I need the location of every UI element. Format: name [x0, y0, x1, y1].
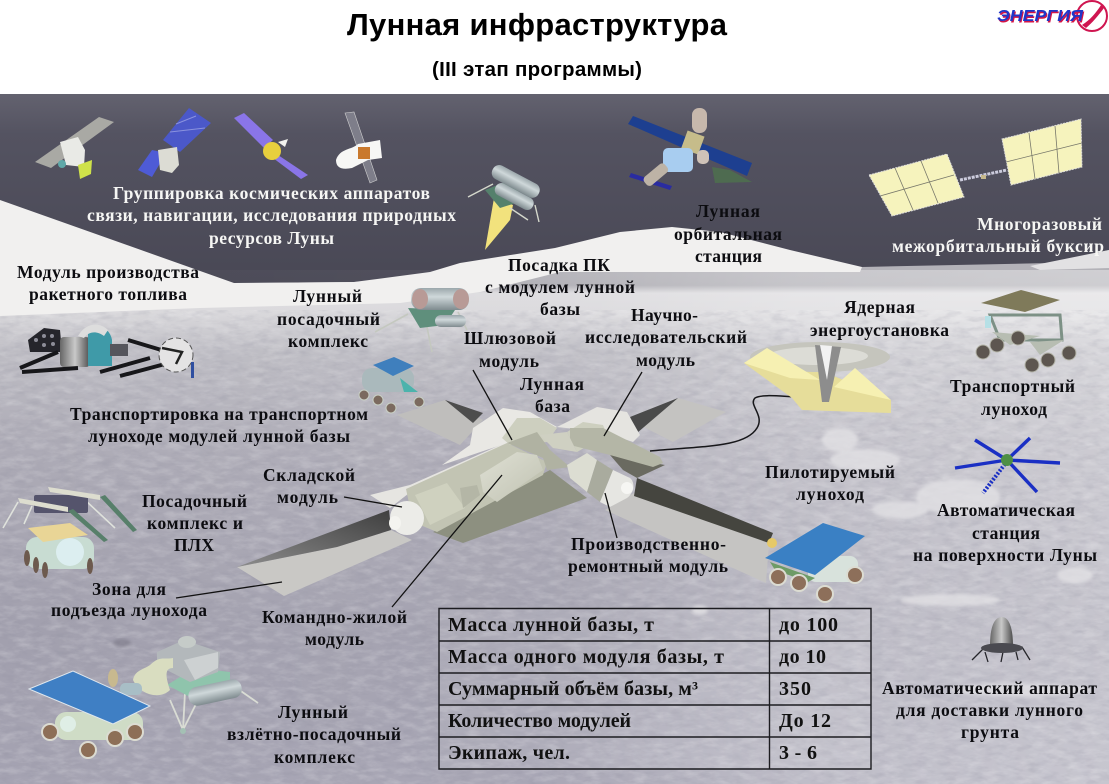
- label: command module: Командно-жилой: [262, 607, 407, 627]
- label: landing complex: комплекс: [288, 331, 368, 351]
- data table: Суммарный объём базы, м³: [448, 678, 698, 700]
- label: soil return: для доставки лунного: [896, 700, 1083, 720]
- label: piloted rover: луноход: [796, 484, 864, 504]
- ramp: left: [237, 530, 412, 596]
- label: landing complex and PLH: комплекс и: [147, 513, 243, 533]
- label: rover access zone: [51, 579, 207, 620]
- label: piloted rover: Пилотируемый: [765, 462, 895, 482]
- label: airlock module: Шлюзовой: [464, 328, 556, 348]
- label: ascent-landing complex: Лунный: [278, 702, 348, 722]
- label: research module: модуль: [636, 350, 695, 370]
- satellite 4: [336, 112, 382, 183]
- label: interorbital tug: Многоразовый: [977, 214, 1102, 234]
- transport rover with module: [359, 357, 424, 413]
- automatic soil return vehicle: [972, 617, 1030, 662]
- transport rover: [976, 290, 1076, 372]
- lunar orbital station: [628, 108, 752, 190]
- excavation floor: [433, 470, 587, 543]
- nuclear power unit: [744, 342, 891, 413]
- label: rover access zone: подъезда лунохода: [51, 600, 207, 620]
- label: lunar base: база: [535, 396, 570, 416]
- label: surface station: Автоматическая: [937, 500, 1075, 520]
- lunar lander complex: [375, 288, 469, 352]
- lunar base centerpiece: [237, 396, 824, 596]
- storage module: [415, 483, 465, 525]
- soil mound left: [442, 408, 557, 465]
- label: module transport: Транспортировка на транспортном: [70, 404, 368, 424]
- logo: Energia: ЭНЕРГИЯ: [997, 8, 1083, 25]
- label: transport rover: луноход: [981, 399, 1047, 419]
- label: landing complex: посадочный: [277, 309, 380, 329]
- label: fuel module: Модуль производства: [17, 262, 199, 282]
- label: soil return: Автоматический аппарат: [882, 678, 1097, 698]
- piloted rover: [765, 523, 865, 602]
- data table: до 10: [779, 646, 826, 668]
- central junction: [507, 432, 570, 470]
- label: transport rover: [950, 376, 1075, 419]
- label: research module: [585, 305, 747, 370]
- satellite 1: [35, 117, 114, 179]
- logo: Energia: ЭНЕРГИЯ: [998, 10, 1084, 26]
- label: orbital station: [674, 201, 782, 266]
- subtitle: (III этап программы): [432, 58, 642, 81]
- label: spacecraft constellation: Группировка космических аппаратов: [113, 183, 430, 203]
- label: spacecraft constellation: ресурсов Луны: [209, 228, 334, 248]
- label: lunar base: Лунная: [520, 374, 584, 394]
- data table: Количество модулей: [448, 710, 631, 732]
- white hills horizon: [0, 200, 862, 316]
- label: storage module: Складской: [263, 465, 355, 485]
- label: spacecraft constellation: связи, навигации, исследования природных: [87, 205, 456, 225]
- logo: Energia: [997, 1, 1107, 31]
- label: repair module: Производственно-: [571, 534, 726, 554]
- data table: Масса лунной базы, т: [448, 614, 654, 636]
- label: surface station: [913, 500, 1097, 565]
- ramp: top right: [630, 398, 726, 442]
- soil mound right: [557, 407, 640, 442]
- soil strip left: [370, 442, 510, 508]
- right dark notch: [610, 455, 665, 478]
- satellite 3: [234, 113, 308, 179]
- reusable interorbital tug: [869, 119, 1082, 216]
- label: landing complex and PLH: Посадочный: [142, 491, 247, 511]
- data table: 3 - 6: [779, 742, 817, 764]
- lunar ground: [0, 250, 1109, 784]
- sky: [0, 94, 1109, 294]
- label: crew vehicle landing: Посадка ПК: [508, 255, 610, 275]
- label: lunar base: [520, 374, 584, 416]
- label: interorbital tug: [892, 214, 1104, 256]
- label: module transport: луноходе модулей лунной базы: [88, 426, 350, 446]
- label: storage module: [263, 465, 355, 507]
- label: fuel module: ракетного топлива: [29, 284, 187, 304]
- label: landing complex and PLH: ПЛХ: [174, 535, 214, 555]
- landing complex and rover: [3, 487, 137, 578]
- right horizon ridge: [1030, 250, 1109, 270]
- repair module: [567, 453, 597, 492]
- translucent shell left: [406, 443, 547, 532]
- label: nuclear unit: Ядерная: [844, 297, 915, 317]
- data table: Экипаж, чел.: [448, 742, 570, 764]
- label: research module: исследовательский: [585, 327, 747, 347]
- label: ascent-landing complex: взлётно-посадочный: [227, 724, 401, 744]
- label: soil return: грунта: [961, 722, 1019, 742]
- lunar ascent-landing complex with rover: [29, 636, 258, 758]
- label: airlock module: модуль: [479, 351, 539, 371]
- label: repair module: ремонтный модуль: [568, 556, 728, 576]
- label: landing complex and PLH: [142, 491, 247, 555]
- label: ascent-landing complex: комплекс: [274, 747, 355, 767]
- satellite 2: [138, 108, 211, 177]
- label: crew vehicle landing: [485, 255, 635, 319]
- label: orbital station: станция: [695, 246, 762, 266]
- label: interorbital tug: межорбитальный буксир: [892, 236, 1104, 256]
- data table: до 100: [779, 614, 838, 636]
- label: module transport: [70, 404, 368, 446]
- data table: До 12: [779, 710, 831, 732]
- label: spacecraft constellation: [87, 183, 456, 248]
- label: crew vehicle landing: с модулем лунной: [485, 277, 635, 297]
- data table: [439, 608, 871, 769]
- data table: 350: [779, 678, 811, 700]
- upper dome right: [567, 422, 607, 452]
- ramp: bottom right: [605, 493, 769, 583]
- label: orbital station: орбитальная: [674, 224, 782, 244]
- label: orbital station: Лунная: [696, 201, 760, 221]
- label: research module: Научно-: [631, 305, 698, 325]
- label: airlock module: [464, 328, 556, 371]
- label: crew vehicle landing: базы: [540, 299, 580, 319]
- label: soil return: [882, 678, 1097, 742]
- label lines: [176, 370, 642, 607]
- power cable: [650, 396, 824, 451]
- label: rover access zone: Зона для: [92, 579, 166, 599]
- label: ascent-landing complex: [227, 702, 401, 767]
- label: command module: модуль: [305, 629, 364, 649]
- title: Лунная инфраструктура: [347, 7, 728, 42]
- data table: Масса одного модуля базы, т: [448, 646, 724, 668]
- translucent shell right: [570, 428, 663, 467]
- fuel lander descending: [468, 163, 542, 250]
- label: nuclear unit: [810, 297, 949, 340]
- label: landing complex: [277, 286, 380, 351]
- label: surface station: станция: [972, 523, 1040, 543]
- label: surface station: на поверхности Луны: [913, 545, 1097, 565]
- upper dome left: [502, 418, 557, 445]
- label: storage module: модуль: [277, 487, 338, 507]
- automatic surface station: [955, 438, 1060, 493]
- command module: [480, 452, 543, 502]
- rocket fuel production module: [20, 325, 194, 378]
- storage end cap: [390, 501, 424, 535]
- label: landing complex: Лунный: [293, 286, 362, 306]
- ramp: top left: [397, 400, 483, 445]
- label: transport rover: Транспортный: [950, 376, 1075, 396]
- label: piloted rover: [765, 462, 895, 504]
- label: command module: [262, 607, 407, 649]
- label: repair module: [568, 534, 728, 576]
- label: fuel module: [17, 262, 199, 304]
- label: nuclear unit: энергоустановка: [810, 320, 949, 340]
